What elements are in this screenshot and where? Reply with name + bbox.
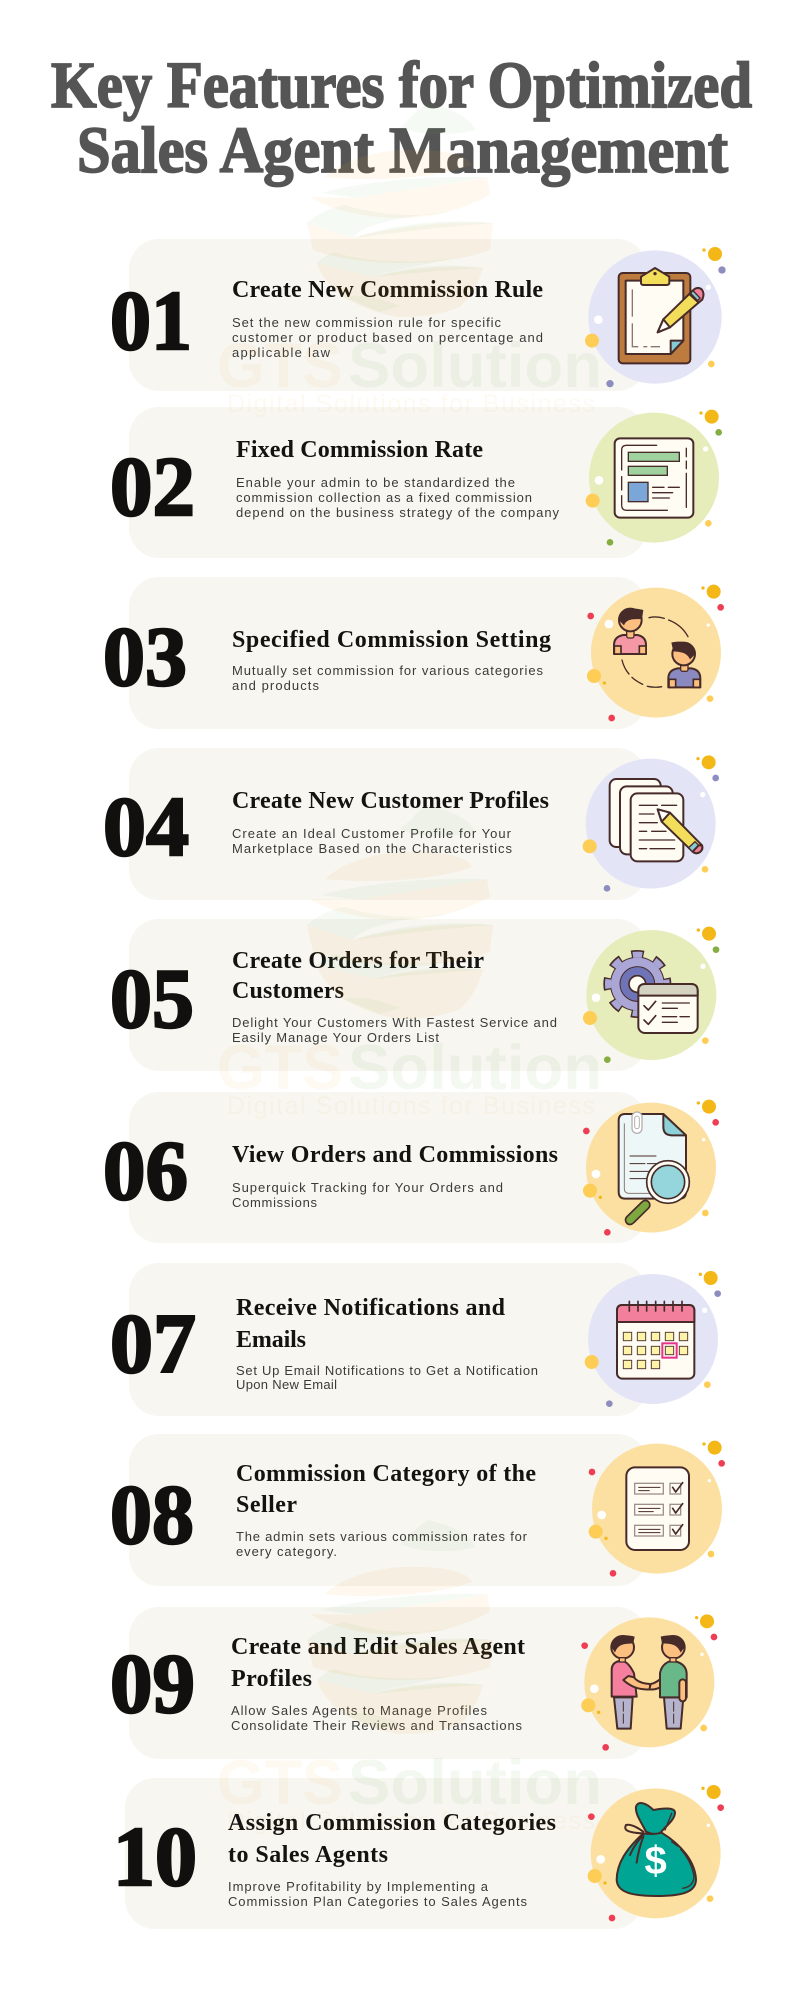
description 07: Set Up Email Notifications to Get a Notification <box>236 1363 538 1378</box>
description 01 <box>232 315 543 360</box>
description 10: Improve Profitability by Implementing a <box>228 1879 489 1894</box>
heading 07: Emails <box>236 1327 306 1353</box>
description 02: Enable your admin to be standardized the <box>236 475 515 490</box>
panel: 07 receive notifications and emails <box>110 1263 647 1416</box>
heading 09 <box>231 1634 525 1692</box>
watermark logo bottom: GTS <box>217 1748 343 1818</box>
heading 06: View Orders and Commissions <box>232 1142 558 1168</box>
description 06: Commissions <box>232 1195 318 1210</box>
panel: 08 commission category of the seller <box>110 1434 647 1586</box>
description 04: Marketplace Based on the Characteristics <box>232 841 512 856</box>
description 03 <box>232 663 544 693</box>
description 05: Delight Your Customers With Fastest Service and <box>232 1015 557 1030</box>
description 09: Allow Sales Agents to Manage Profiles <box>231 1703 488 1718</box>
panel: 10 assign commission categories to sales agents <box>113 1778 643 1929</box>
panel: 04 create new customer profiles <box>103 748 647 900</box>
number 02: 02 <box>110 440 195 534</box>
description 10 <box>228 1879 528 1909</box>
description 09: Consolidate Their Reviews and Transactions <box>231 1718 522 1733</box>
description 04: Create an Ideal Customer Profile for Your <box>232 826 512 841</box>
description 02: depend on the business strategy of the company <box>236 505 560 520</box>
heading 03: Specified Commission Setting <box>232 627 551 653</box>
heading 02: Fixed Commission Rate <box>236 437 483 463</box>
watermark logo middle: Digital Solutions for Business <box>227 1092 595 1120</box>
heading 05 <box>232 948 484 1004</box>
icon: gear and checklist window <box>583 927 719 1063</box>
icon: calendar <box>585 1271 721 1407</box>
panel: 01 create new commission rule <box>110 239 647 391</box>
icon: document with magnifier <box>583 1100 719 1236</box>
heading 05: Customers <box>232 978 344 1004</box>
watermark logo top: Solution <box>348 331 602 401</box>
description 04 <box>232 826 512 856</box>
description 06 <box>232 1180 503 1210</box>
watermark logo top: Digital Solutions for Business <box>227 390 595 418</box>
watermark logo bottom: Digital Solutions for Business <box>227 1807 595 1835</box>
icon: document layout <box>586 410 722 546</box>
watermark logo bottom <box>217 1520 602 1835</box>
watermark logo top: GTS <box>217 331 343 401</box>
description 08: every category. <box>236 1544 337 1559</box>
icon: money bag <box>588 1785 724 1921</box>
description 01: customer or product based on percentage and <box>232 330 543 345</box>
description 01: Set the new commission rule for specific <box>232 315 502 330</box>
watermark logo middle: GTS <box>217 1033 343 1103</box>
number 01: 01 <box>110 274 192 368</box>
icon: two people connected <box>587 585 724 721</box>
number 03: 03 <box>103 610 187 704</box>
description 03: and products <box>232 678 320 693</box>
description 03: Mutually set commission for various categories <box>232 663 544 678</box>
description 05: Easily Manage Your Orders List <box>232 1030 439 1045</box>
icon: checklist document <box>589 1441 725 1577</box>
icon: money bag: $ <box>645 1839 667 1883</box>
heading 09: Create and Edit Sales Agent <box>231 1634 525 1660</box>
watermark logo top <box>217 103 602 418</box>
description 02 <box>236 475 560 520</box>
panel: 09 create and edit sales agent profiles <box>110 1607 647 1759</box>
number 08: 08 <box>110 1468 194 1562</box>
description 08 <box>236 1529 528 1559</box>
panel: 05 create orders for their customers <box>110 919 647 1071</box>
description 01: applicable law <box>232 345 331 360</box>
heading 10 <box>228 1810 556 1868</box>
title: Sales Agent Management <box>77 114 728 187</box>
description 06: Superquick Tracking for Your Orders and <box>232 1180 503 1195</box>
heading 05: Create Orders for Their <box>232 948 484 974</box>
watermark logo middle: Solution <box>348 1033 602 1103</box>
heading 01: Create New Commission Rule <box>232 277 543 303</box>
description 08: The admin sets various commission rates for <box>236 1529 528 1544</box>
description 09 <box>231 1703 522 1733</box>
description 07 <box>236 1363 538 1392</box>
number 09: 09 <box>110 1637 195 1731</box>
icon: handshake <box>581 1614 717 1751</box>
heading 08: Commission Category of the <box>236 1461 536 1487</box>
panel: 02 fixed commission rate <box>110 407 647 558</box>
number 05: 05 <box>110 952 194 1046</box>
description 07: Upon New Email <box>236 1377 337 1392</box>
heading 07 <box>236 1295 506 1353</box>
heading 09: Profiles <box>231 1666 312 1692</box>
panel: 03 specified commission setting <box>103 577 647 729</box>
heading 08: Seller <box>236 1492 297 1518</box>
number 07: 07 <box>110 1297 196 1391</box>
icon: clipboard with pencil <box>585 247 726 387</box>
heading 07: Receive Notifications and <box>236 1295 506 1321</box>
title <box>51 49 752 187</box>
icon: stacked documents with pencil <box>583 755 719 892</box>
description 05 <box>232 1015 557 1045</box>
watermark logo middle <box>217 805 602 1120</box>
description 10: Commission Plan Categories to Sales Agents <box>228 1894 528 1909</box>
number 06: 06 <box>103 1124 188 1218</box>
heading 04: Create New Customer Profiles <box>232 788 549 814</box>
heading 10: Assign Commission Categories <box>228 1810 556 1836</box>
heading 08 <box>236 1461 536 1518</box>
heading 10: to Sales Agents <box>228 1842 388 1868</box>
watermark logo bottom: Solution <box>348 1748 602 1818</box>
description 02: commission collection as a fixed commission <box>236 490 532 505</box>
panel: 06 view orders and commissions <box>103 1092 647 1243</box>
number 10: 10 <box>113 1810 197 1904</box>
number 04: 04 <box>103 780 189 874</box>
